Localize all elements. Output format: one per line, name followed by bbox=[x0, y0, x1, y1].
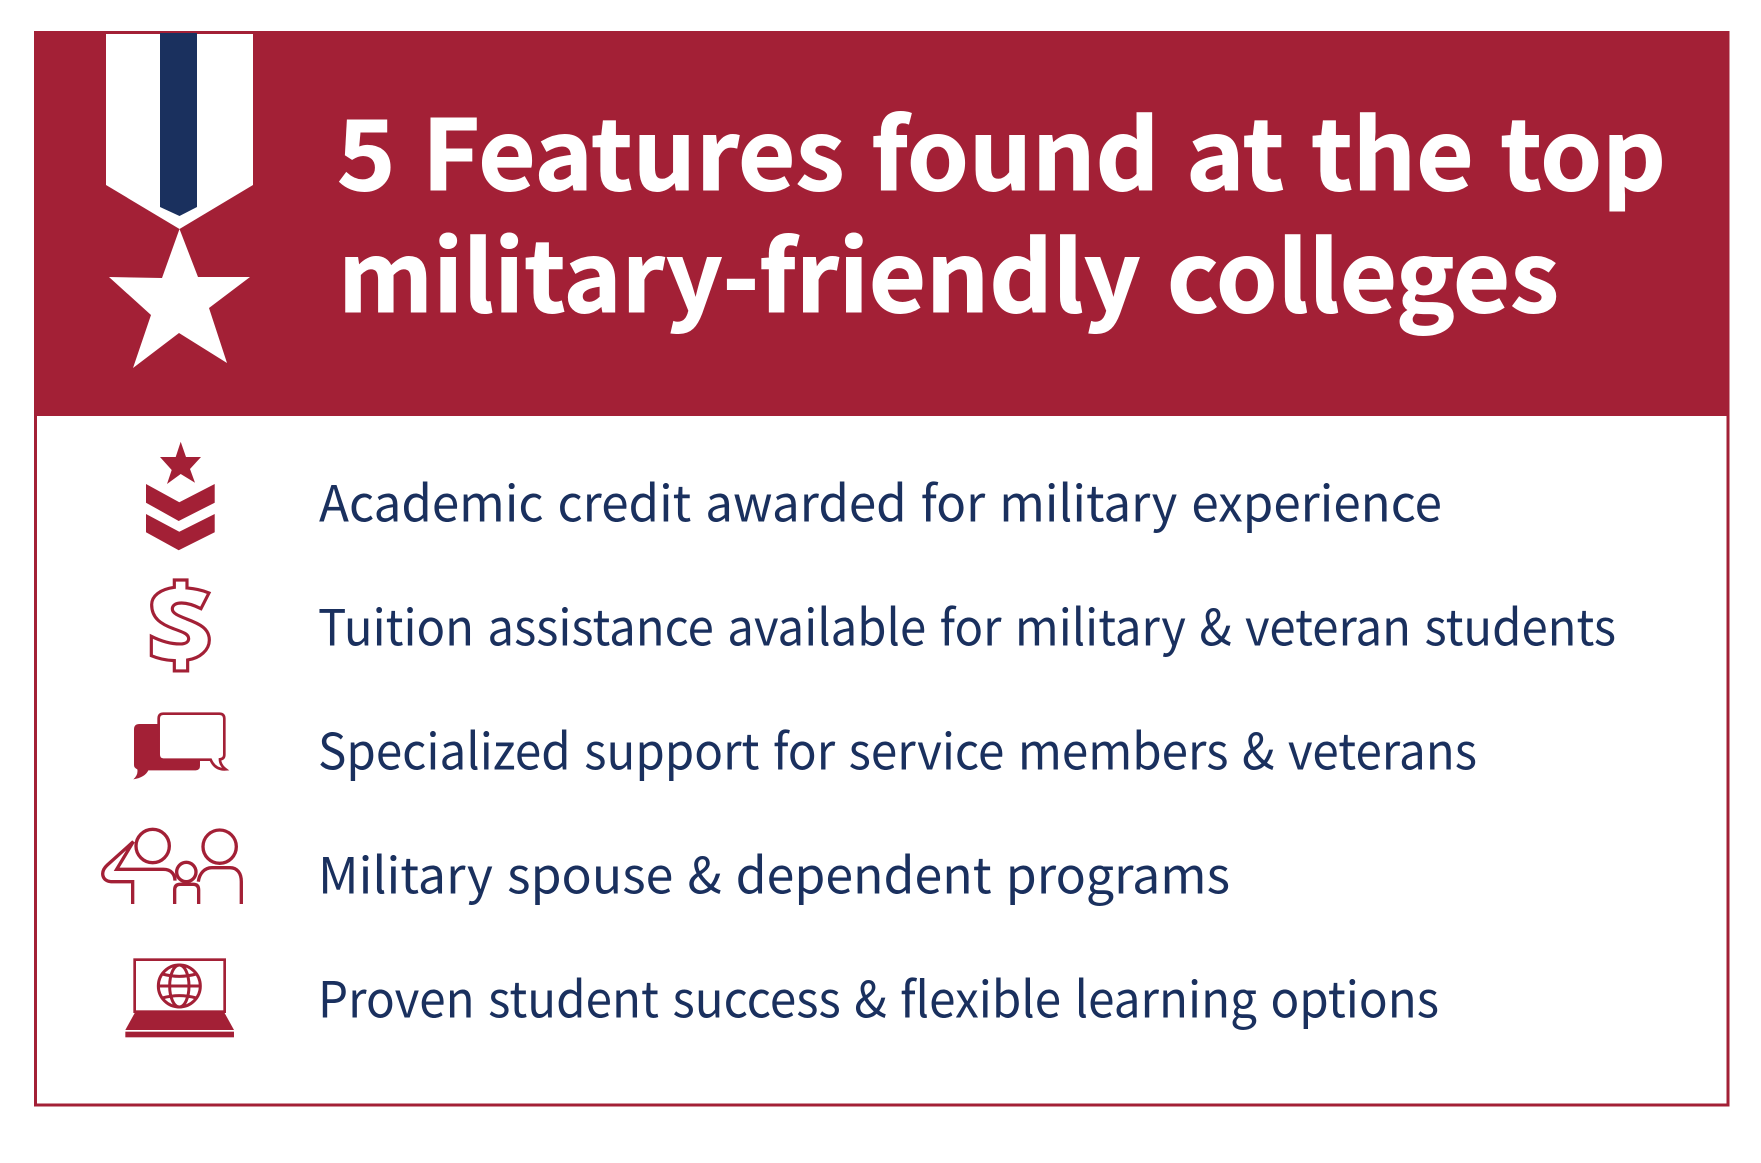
icon: rank star and chevrons bbox=[146, 442, 215, 550]
feature text: proven success: Proven student success & flexible learning options bbox=[318, 960, 1439, 1032]
feature text: specialized support: Specialized support for service members & veterans bbox=[318, 712, 1477, 784]
icon: speech bubbles bbox=[133, 714, 226, 779]
icon: saluting family bbox=[103, 829, 241, 904]
title bbox=[337, 77, 1666, 340]
icon: dollar sign bbox=[151, 580, 209, 671]
icon: laptop with globe bbox=[125, 960, 234, 1037]
panel: header band bbox=[34, 31, 1730, 416]
icon: medal bbox=[106, 33, 253, 368]
feature text: tuition assistance: Tuition assistance available for military & veteran students bbox=[318, 588, 1616, 660]
title: 5 Features found at the top bbox=[337, 77, 1666, 218]
feature text: military spouse: Military spouse & dependent programs bbox=[318, 836, 1230, 908]
feature text: academic credit: Academic credit awarded for military experience bbox=[319, 464, 1442, 536]
title: military-friendly colleges bbox=[338, 199, 1559, 340]
